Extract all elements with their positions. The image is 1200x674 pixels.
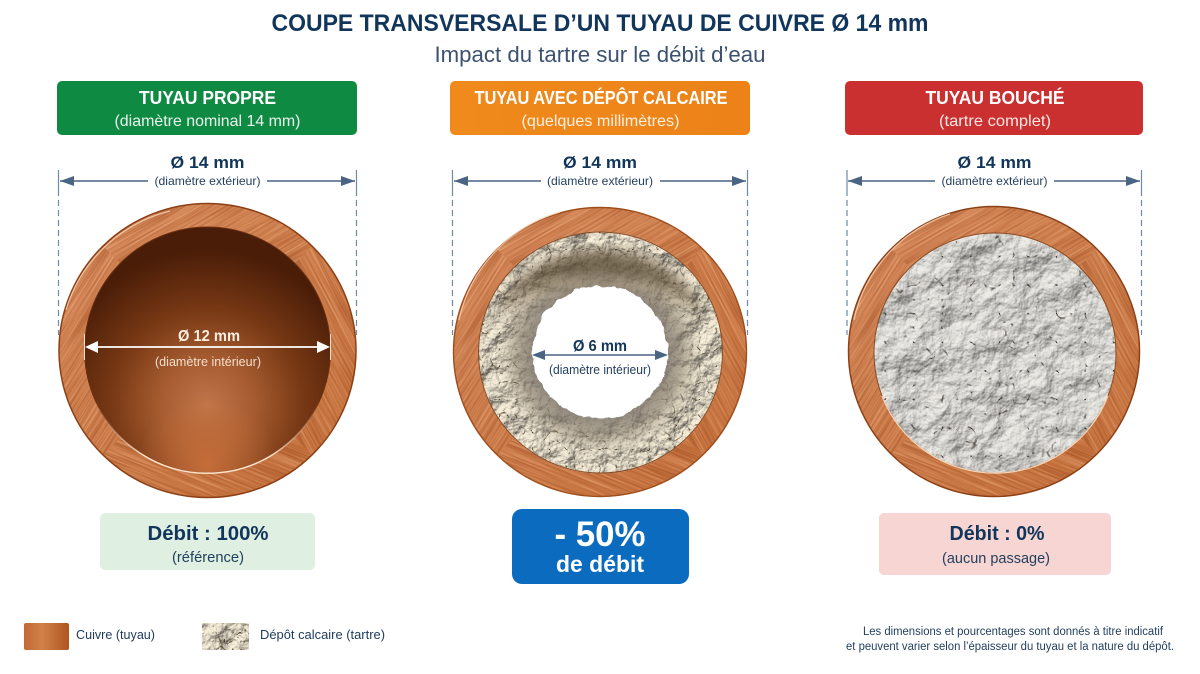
header: tuyau propre — [57, 81, 357, 135]
inner dimension: 6 mm: (diamètre intérieur) — [549, 363, 651, 377]
header: tuyau bouché — [845, 81, 1143, 135]
header: dépôt calcaire: (quelques millimètres) — [522, 113, 680, 130]
flow badge: 100% — [100, 513, 315, 570]
flow badge: 0%: (aucun passage) — [942, 550, 1050, 567]
flow badge: -50% — [512, 509, 689, 584]
pipe: partially scaled section — [452, 206, 748, 498]
inner dimension: 12 mm: Ø 12 mm — [178, 328, 240, 345]
header: tuyau bouché: TUYAU BOUCHÉ — [926, 87, 1064, 108]
outer dimension: 14 mm — [58, 154, 356, 335]
legend label: copper: Cuivre (tuyau) — [76, 628, 155, 642]
outer dimension: 14 mm: Ø 14 mm — [958, 154, 1032, 172]
pipe: fully blocked section — [848, 206, 1140, 498]
outer dimension: 14 mm: (diamètre extérieur) — [547, 174, 653, 188]
flow badge: 100%: Débit : 100% — [148, 522, 268, 545]
header: tuyau propre: TUYAU PROPRE — [139, 87, 276, 108]
flow badge: 100%: (référence) — [172, 549, 244, 566]
outer dimension: 14 mm — [452, 154, 748, 335]
inner dimension: 6 mm: Ø 6 mm — [573, 338, 627, 355]
flow badge: -50%: de débit — [556, 551, 644, 577]
header: dépôt calcaire — [450, 81, 750, 135]
panel: tuyau propre — [57, 81, 358, 570]
inner dimension: 12 mm — [84, 328, 330, 369]
footnote: Les dimensions et pourcentages sont donnés à titre indicatif — [863, 626, 1164, 638]
panel: tuyau avec dépôt calcaire — [450, 81, 750, 584]
subtitle: Impact du tartre sur le débit d’eau — [434, 42, 766, 67]
pipe: clean copper section — [58, 202, 357, 498]
outer dimension: 14 mm: (diamètre extérieur) — [942, 174, 1048, 188]
header: tuyau bouché: (tartre complet) — [939, 113, 1051, 130]
footnote: et peuvent varier selon l’épaisseur du tuyau et la nature du dépôt. — [846, 641, 1174, 653]
inner dimension: 12 mm: (diamètre intérieur) — [155, 355, 261, 369]
flow badge: 0% — [879, 513, 1111, 575]
header: dépôt calcaire: TUYAU AVEC DÉPÔT CALCAIRE — [474, 87, 728, 108]
legend swatch: copper — [24, 623, 69, 650]
outer dimension: 14 mm — [847, 154, 1142, 335]
legend — [24, 623, 385, 650]
flow badge: 0%: Débit : 0% — [950, 522, 1044, 545]
title: COUPE TRANSVERSALE D’UN TUYAU DE CUIVRE Ø 14 mm — [272, 10, 928, 37]
opening: free water passage — [532, 286, 668, 418]
outer dimension: 14 mm: Ø 14 mm — [170, 154, 244, 172]
outer dimension: 14 mm: (diamètre extérieur) — [154, 174, 261, 188]
flow badge: -50%: - 50% — [554, 515, 646, 554]
header: tuyau propre: (diamètre nominal 14 mm) — [114, 113, 300, 130]
inner dimension: 6 mm — [532, 338, 668, 377]
outer dimension: 14 mm: Ø 14 mm — [563, 154, 637, 172]
legend swatch: limescale — [202, 623, 249, 650]
legend label: limescale: Dépôt calcaire (tartre) — [260, 628, 385, 642]
footnote — [846, 626, 1174, 653]
panel: tuyau bouché — [845, 81, 1143, 575]
